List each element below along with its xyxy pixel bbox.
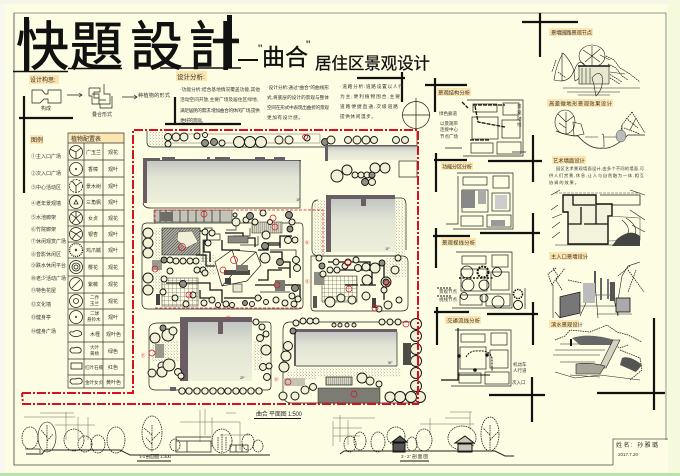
functional zoning diagram xyxy=(441,162,513,229)
plant names: 观叶 xyxy=(108,183,118,190)
sketch 1: pavilion xyxy=(549,28,640,96)
plant names: 三角枫 xyxy=(86,199,101,206)
building 1: 1F xyxy=(296,197,301,202)
concept shape: 构成 xyxy=(41,105,51,112)
title: 計 xyxy=(188,5,241,81)
landscape structure diagram: 线 xyxy=(517,121,522,127)
dashed red site line xyxy=(155,210,323,308)
heading: design concept xyxy=(29,75,59,84)
eastern garden xyxy=(311,255,408,312)
sketch 3: art wall xyxy=(549,156,645,246)
red circled labels xyxy=(141,134,409,397)
designer name and date: 2017.7.20 xyxy=(618,452,639,457)
legend list: ⑨跌水休闲平台 xyxy=(31,262,66,269)
plant names: 观叶 xyxy=(108,247,118,254)
plant names: 景木树 xyxy=(86,183,101,190)
plan title xyxy=(254,410,303,418)
title: 題 xyxy=(70,5,123,81)
traffic flow diagram xyxy=(441,316,527,386)
plant names: 木槿 xyxy=(90,331,100,338)
paragraph 2: 更加有设计感。 xyxy=(267,114,303,121)
plant names: 观花 xyxy=(108,264,118,271)
sketch 3: art wall: 艺术墙面设计 xyxy=(553,156,585,164)
buildings xyxy=(25,437,248,453)
sight line diagram: 景观节点 xyxy=(439,289,457,295)
paragraph 1: ·功能分析:结合基地情况覆盖功能,其他 xyxy=(180,86,260,93)
top planting strip xyxy=(147,131,417,148)
title xyxy=(13,5,241,81)
maze shape: 叠合形式 xyxy=(92,111,112,118)
legend list: ⑦休闲观赏广场 xyxy=(31,238,66,245)
heading: legend: 图例 xyxy=(31,136,43,144)
section drawing 1-1 xyxy=(22,409,270,461)
title: 設 xyxy=(130,5,183,81)
legend list: ③中心活动区 xyxy=(31,184,61,191)
sketch 3: art wall: 协调的效果。 xyxy=(549,179,579,186)
section label xyxy=(137,453,171,461)
plant names: 二乔 xyxy=(90,294,99,301)
sight line diagram: 景观视线分析 xyxy=(442,238,476,246)
legend list: ⑩老少活动广场 xyxy=(31,275,66,282)
landscape structure diagram: 以景观带 xyxy=(440,121,458,127)
tree cluster north-east xyxy=(331,163,390,186)
table header xyxy=(69,133,124,143)
section label: 1-1'剖面图 1:300 xyxy=(139,453,171,460)
sketch 4: entrance wall xyxy=(548,252,644,318)
plant names: 绿色 xyxy=(108,348,118,355)
sight line diagram: 视线节点 xyxy=(439,296,457,303)
landscape structure diagram: 景观结构分析 xyxy=(438,88,471,96)
legend list: ⑤水池廊架 xyxy=(31,214,56,221)
landscape structure diagram: 观 xyxy=(517,110,522,116)
plant names: 鸡爪槭 xyxy=(86,247,101,254)
plant names: 女贞 xyxy=(88,215,98,222)
arrow xyxy=(122,95,137,99)
paragraph 3: 为主,便利植物围合,主要 xyxy=(340,93,400,100)
heading: design analysis xyxy=(176,71,207,81)
subtitle: 居住区景观设计 xyxy=(315,54,430,73)
red circled labels: ⑬ xyxy=(226,314,231,321)
plant names: 黄叶色 xyxy=(106,379,121,386)
sketch 3: art wall: 供人们赏景,休息,让人与自然融为一体,相互 xyxy=(549,172,644,179)
central garden xyxy=(142,210,323,309)
sketch 3: art wall: 园区艺术景观墙面设计,由多个不同的墙面,可 xyxy=(556,165,644,172)
plant names: 香樟 xyxy=(88,166,98,173)
analysis diagrams column xyxy=(437,88,527,386)
paragraph 1: 满足居民的需求,增加曲合的休闲广场,提供 xyxy=(180,107,260,114)
plant names: 金叶女贞 xyxy=(85,379,103,386)
plant names: 黄杨 xyxy=(90,350,99,357)
heading: legend xyxy=(30,135,43,144)
legend list xyxy=(30,135,66,335)
table grid xyxy=(68,133,124,388)
traffic flow diagram: 次入口 xyxy=(512,379,526,386)
compass xyxy=(402,98,430,128)
subtitle: " xyxy=(306,38,310,52)
traffic flow diagram: 交通流线分析 xyxy=(447,316,481,324)
functional zoning diagram: 功能分区分析 xyxy=(442,162,473,170)
paragraph 1: 活动空间开放,主要广场及居住区绿地, xyxy=(180,96,258,103)
building top right xyxy=(325,145,417,177)
title: 快 xyxy=(16,5,69,81)
landscape structure diagram: 绿色廊道 xyxy=(439,110,457,117)
plant symbols xyxy=(70,146,82,384)
red circled labels: ⑥ xyxy=(305,239,310,246)
sketch 4: entrance wall: 主入口景墙设计 xyxy=(551,252,589,260)
legend list: ⑧音影休闲区 xyxy=(31,251,61,258)
red circled labels: ⑪ xyxy=(141,352,146,359)
plant names: 观花 xyxy=(108,215,118,222)
concept caption: 种植物的形式 xyxy=(138,91,171,99)
building 4 xyxy=(279,318,426,403)
legend list: ⑪特色花屋 xyxy=(31,287,56,294)
plant names: 红叶石楠 xyxy=(85,364,103,371)
sketch 2: micro terrain xyxy=(547,99,645,148)
paragraph 3: 提供休闲漫步。 xyxy=(340,113,376,120)
site master plan xyxy=(22,130,426,418)
building 2 xyxy=(312,195,406,256)
paragraph 3: ·道路分析:道路设置以人行 xyxy=(340,83,403,90)
red circled labels: ⑫ xyxy=(274,376,279,383)
plant names: 二球 xyxy=(90,310,99,316)
landscape structure diagram: 景 xyxy=(517,104,522,110)
paragraph 3: 道路便捷直通,次级道路 xyxy=(340,103,398,110)
traffic flow diagram: 机动车 xyxy=(513,361,527,368)
legend list: ①主入口广场 xyxy=(31,153,61,160)
designer name and date: 姓名: 孙雅璐 xyxy=(616,441,658,449)
building 3: 2F xyxy=(240,375,245,380)
plant names: 玉兰 xyxy=(90,300,99,306)
plant names: 观花 xyxy=(108,281,118,288)
paragraph 2: 空间在形式中表现出曲折的景观 xyxy=(267,104,329,111)
subtitle: 曲合 xyxy=(262,44,308,70)
plant names: 银杏 xyxy=(88,231,98,238)
plant names xyxy=(85,149,121,386)
plant names: 悬铃木 xyxy=(87,316,101,323)
legend list: ⑫文化墙 xyxy=(31,301,51,308)
landscape structure diagram: 轴 xyxy=(517,115,522,122)
design analysis text xyxy=(176,71,403,124)
sketch 5: waterfront: 滨水景观设计 xyxy=(551,320,583,328)
building 2: 1F xyxy=(385,246,390,251)
plant names: 观花 xyxy=(108,149,118,156)
paragraph 2: 式,将底层的设计的景观与整体 xyxy=(267,94,329,101)
trees xyxy=(22,416,263,453)
plant names: 观叶色 xyxy=(106,331,121,338)
traffic flow diagram: 人行道 xyxy=(513,367,527,374)
designer name and date xyxy=(616,441,658,457)
plant legend table xyxy=(68,133,124,388)
plant names: 观叶 xyxy=(108,166,118,173)
plant names: 大叶 xyxy=(90,344,99,351)
landscape structure diagram: 连接中心 xyxy=(440,126,458,133)
table header: 植物配置表 xyxy=(71,135,101,143)
subtitle xyxy=(238,38,430,73)
design concept xyxy=(29,75,171,118)
plant names: 广玉兰 xyxy=(86,149,101,156)
section drawing 2-2: 2-2'剖面图 xyxy=(401,453,428,460)
construction lines xyxy=(24,409,250,450)
red circled labels: ⑤ xyxy=(305,278,310,285)
legend list: ⑭健身广场 xyxy=(31,328,56,335)
plant names: 红色 xyxy=(108,364,118,371)
plant names: 樱花 xyxy=(88,264,98,271)
paragraph 1: 更好的景观。 xyxy=(180,117,206,124)
arrow xyxy=(67,93,82,97)
sketch 2: micro terrain: 高差微地形景观效果设计 xyxy=(549,100,613,108)
building 4: 5F xyxy=(388,360,393,365)
heading: design concept: 设计构思: xyxy=(30,76,56,84)
sight line diagram xyxy=(437,238,525,310)
plant names: 观叶 xyxy=(108,231,118,238)
landscape structure diagram: 节点广场 xyxy=(440,133,458,140)
building 3 xyxy=(148,317,272,394)
plan title: 曲合 平面图 1:500 xyxy=(256,410,303,418)
heading: design analysis: 设计分析: xyxy=(177,72,205,81)
legend list: ⑬健身亭 xyxy=(31,314,51,321)
concept shape xyxy=(32,90,61,112)
legend list: ②次入口广场 xyxy=(31,170,61,177)
perspective sketches column xyxy=(547,28,645,380)
plant names: 观叶 xyxy=(108,199,118,206)
landscape structure diagram xyxy=(437,88,526,156)
paragraph 2: ·设计分析:通过"曲合"的曲线形 xyxy=(267,84,329,91)
red property boundary xyxy=(22,130,418,404)
plant names: 紫薇 xyxy=(88,281,98,288)
legend list: ④老年景观墙 xyxy=(31,200,61,207)
building 1 xyxy=(143,157,301,208)
plant names: 观叶 xyxy=(108,314,118,321)
sketch 5: waterfront xyxy=(549,320,642,380)
subtitle: " xyxy=(258,42,262,56)
plant names: 观花 xyxy=(108,298,118,305)
maze shape xyxy=(89,84,112,118)
legend list: ⑥竹院廊架 xyxy=(31,226,56,233)
ground line xyxy=(26,450,270,455)
sketch 1: pavilion: 景墙园路景观节点 xyxy=(551,28,593,36)
section drawing 2-2 xyxy=(333,412,514,461)
